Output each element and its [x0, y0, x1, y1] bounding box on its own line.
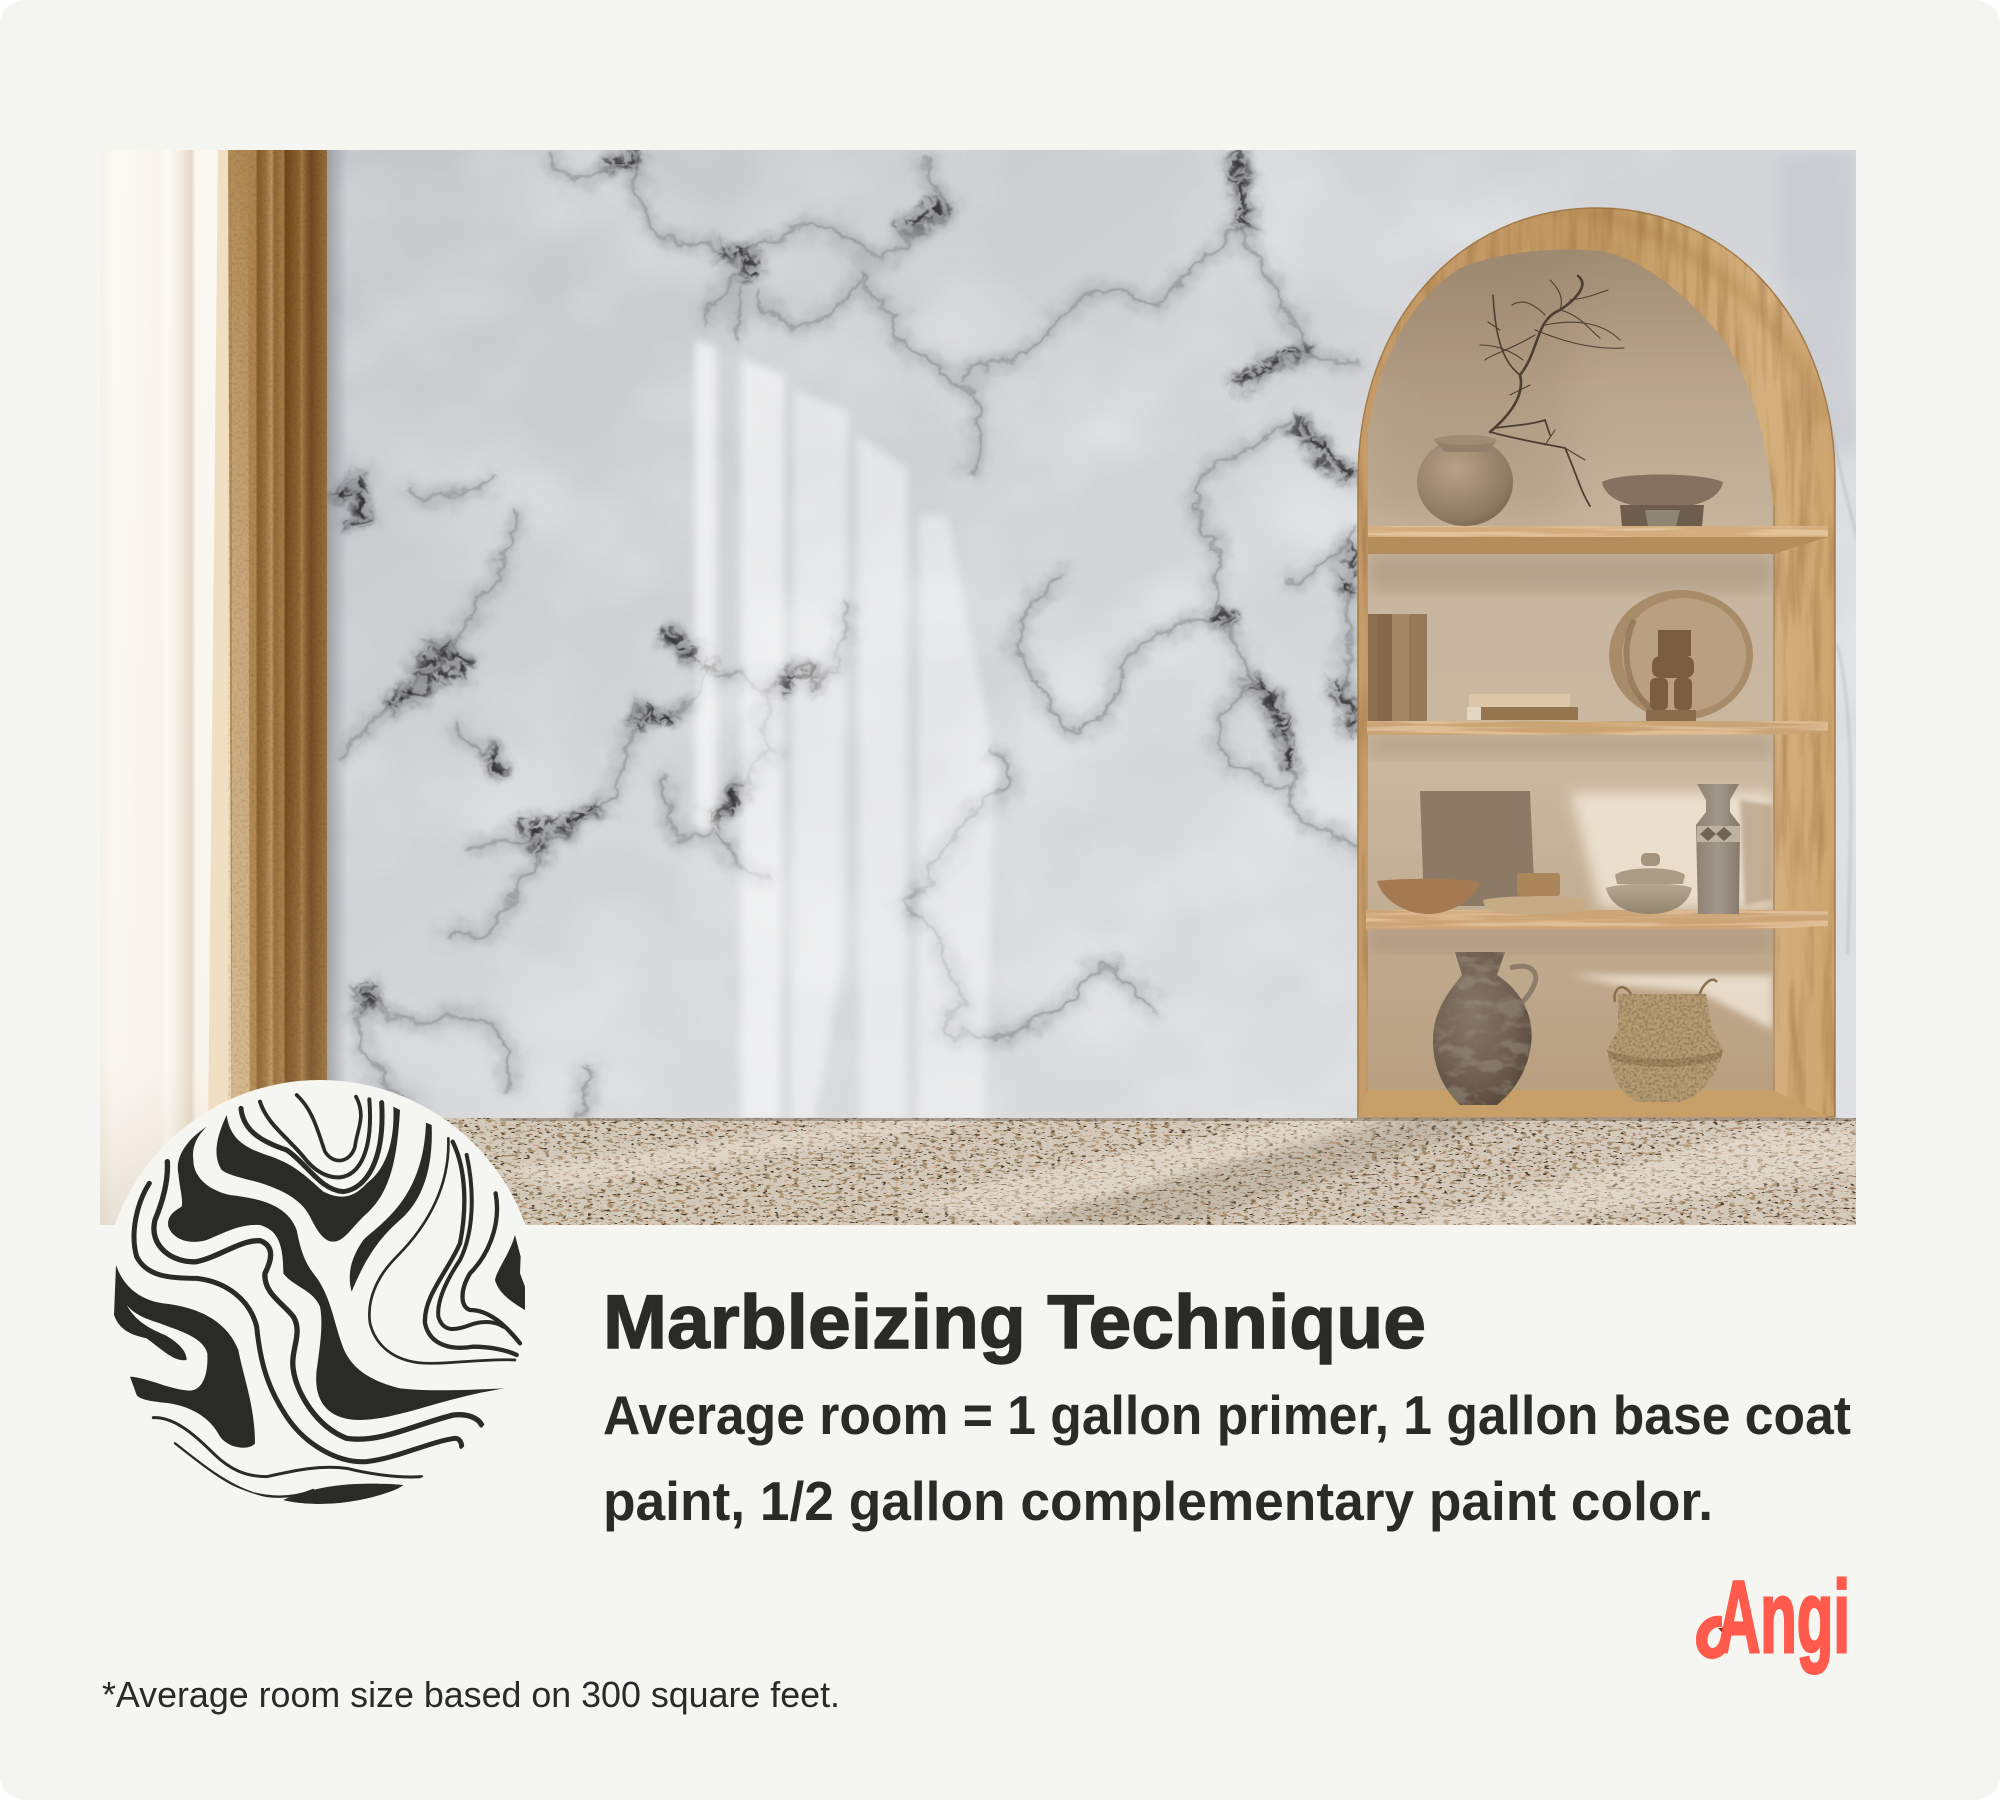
Angi logo: Angi [1717, 1560, 1850, 1674]
tan linen curtain [228, 150, 327, 1099]
marbled ink swirls [114, 1095, 525, 1504]
title: Marbleizing Technique [603, 1280, 1426, 1365]
circle backdrop [102, 1080, 538, 1516]
round clay vase [1417, 435, 1513, 526]
marble wall [326, 150, 1871, 1120]
flat plate [1483, 896, 1587, 914]
small cup [1517, 873, 1560, 896]
window light shafts on wall [695, 339, 997, 1120]
footed stone bowl [1602, 474, 1723, 526]
flat books [1467, 694, 1578, 720]
side panel edge [1773, 505, 1775, 1095]
shelf back wall [1368, 250, 1773, 1095]
description text: Average room = 1 gallon primer, 1 gallon base coat [603, 1384, 1851, 1446]
terrazzo floor [443, 1118, 1856, 1225]
lidded bowl [1606, 853, 1692, 914]
second shelf items [1368, 590, 1753, 721]
arched wooden bookshelf [1358, 204, 1835, 1117]
sunlight patches [1570, 792, 1773, 908]
decorative marbled circle [102, 1080, 538, 1516]
upright books [1368, 614, 1427, 721]
top shelf items [1417, 276, 1723, 526]
clay jug [1433, 952, 1536, 1105]
bottom shelf items [1433, 952, 1723, 1105]
third shelf items [1377, 784, 1740, 914]
sheer white curtain [100, 150, 197, 1225]
Angi logo [1696, 1560, 1850, 1674]
leaning square board [1420, 791, 1535, 906]
photo: marble wall room scene [100, 150, 1871, 1225]
curtains [100, 150, 327, 1225]
description text: paint, 1/2 gallon complementary paint color. [603, 1470, 1713, 1532]
patterned tall vase [1696, 784, 1740, 914]
woven basket [1607, 980, 1723, 1102]
branch [1480, 276, 1624, 506]
round wood plate [1609, 590, 1753, 720]
shelf boards [1366, 526, 1828, 929]
carved figure [1646, 630, 1696, 721]
footnote: *Average room size based on 300 square feet. [102, 1674, 840, 1715]
bottom board [1358, 1090, 1828, 1117]
wooden bowl [1377, 879, 1480, 914]
description text [603, 1384, 1851, 1532]
